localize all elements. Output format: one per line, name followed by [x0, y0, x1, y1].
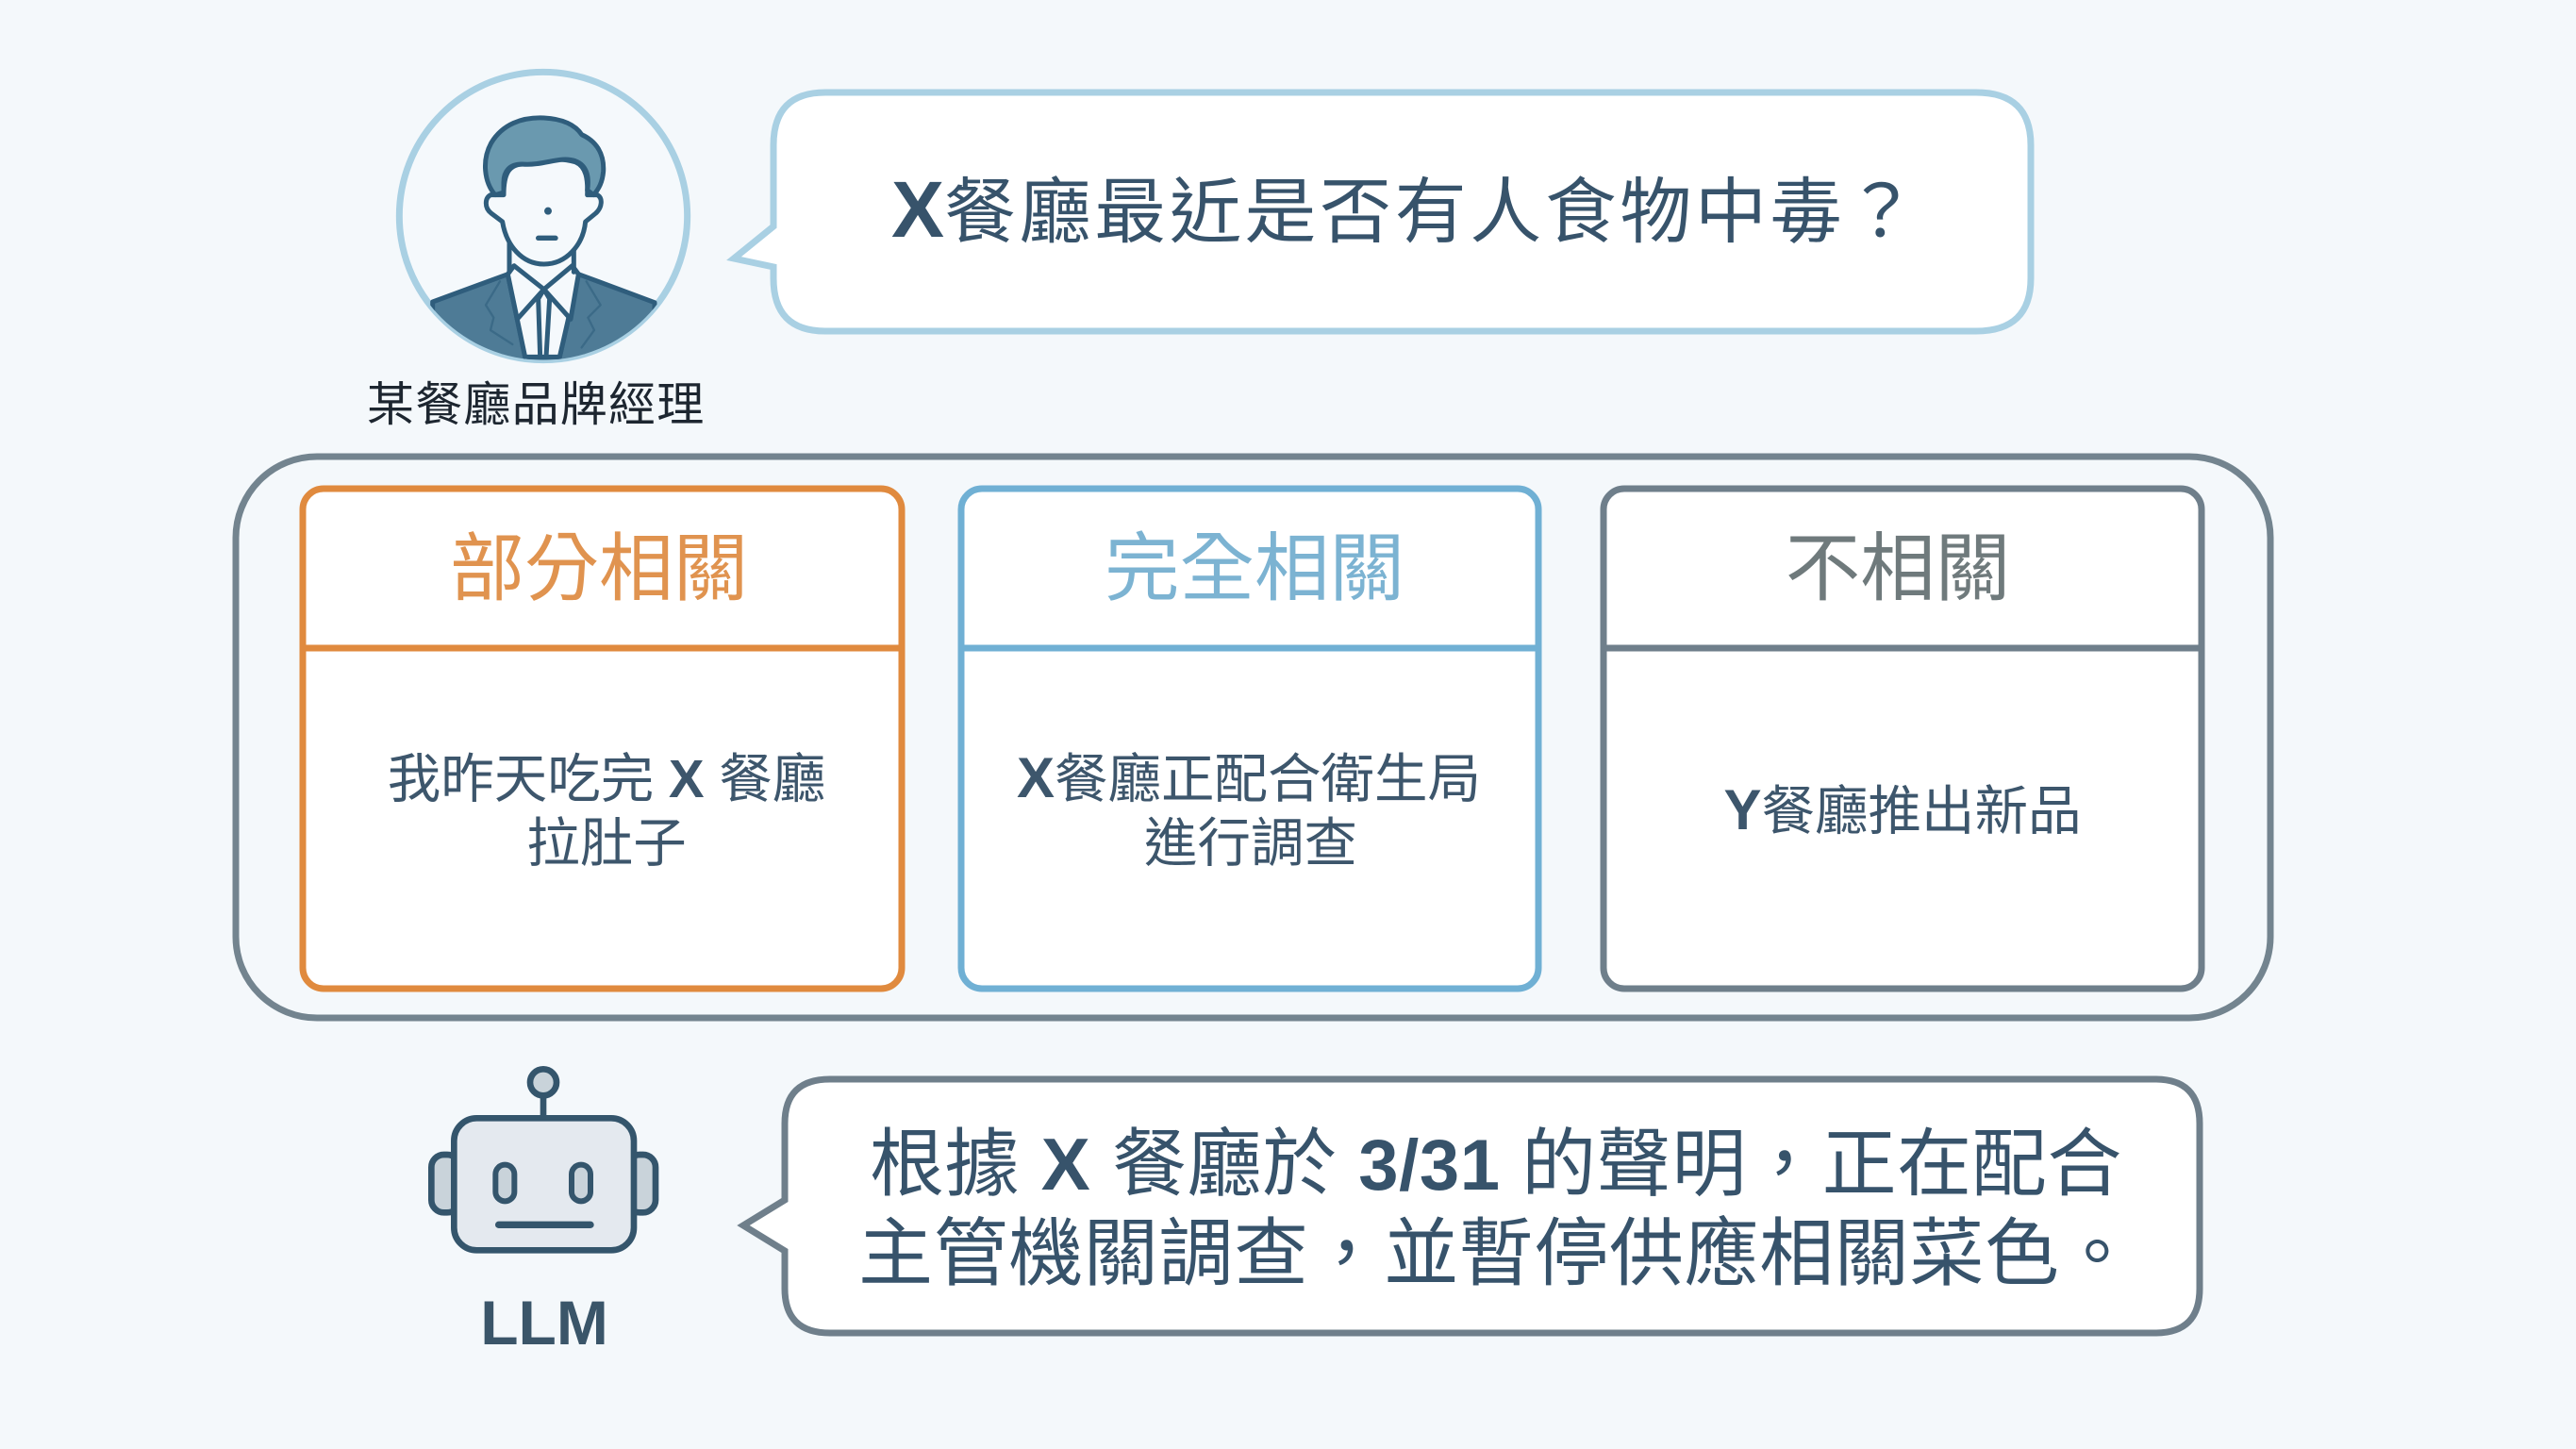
label: LLM: LLM	[480, 1288, 608, 1357]
card: fully relevant	[961, 489, 1538, 989]
icon: robot	[431, 1069, 656, 1250]
speech bubble: question	[734, 92, 2031, 331]
heading: partially relevant: 部分相關	[450, 526, 748, 610]
example text: partially relevant: 拉肚子	[526, 813, 687, 873]
card: partially relevant	[303, 489, 902, 989]
answer text: 根據 X 餐廳於 3/31 的聲明，正在配合	[870, 1122, 2122, 1206]
card: irrelevant	[1604, 489, 2202, 989]
example text: partially relevant: 我昨天吃完 X 餐廳	[388, 749, 825, 808]
icon: manager avatar	[399, 72, 688, 365]
heading: irrelevant: 不相關	[1786, 526, 2010, 610]
infographic canvas	[232, 68, 2273, 1344]
speech bubble: answer	[743, 1079, 2200, 1333]
example text: fully relevant: 進行調查	[1144, 813, 1357, 873]
example text: fully relevant: X餐廳正配合衛生局	[1017, 746, 1481, 809]
panel: retrieved documents	[236, 457, 2270, 1018]
question text: X餐廳最近是否有人食物中毒？	[891, 165, 1920, 254]
label: manager: 某餐廳品牌經理	[367, 378, 705, 431]
heading: fully relevant: 完全相關	[1105, 526, 1404, 610]
example text: irrelevant: Y餐廳推出新品	[1723, 778, 2082, 841]
answer text: 主管機關調查，並暫停供應相關菜色。	[858, 1211, 2135, 1295]
